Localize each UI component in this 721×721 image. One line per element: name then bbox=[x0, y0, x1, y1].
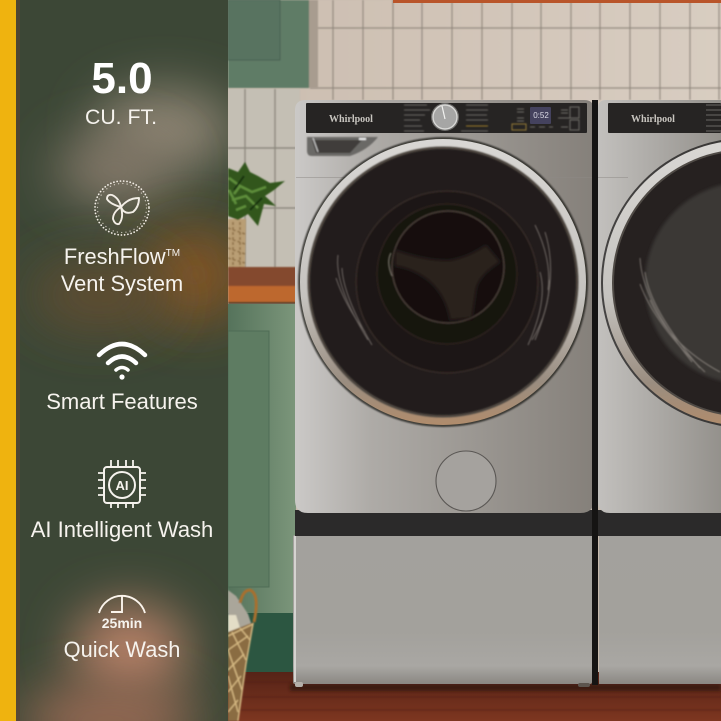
glass swirl highlights bbox=[336, 225, 551, 345]
capacity figure: 5.0 bbox=[91, 54, 153, 103]
label: ai wash: AI Intelligent Wash bbox=[31, 517, 213, 542]
label: freshflow: FreshFlow bbox=[64, 244, 166, 269]
wicker laundry basket bbox=[228, 590, 256, 721]
cycle labels bbox=[404, 105, 488, 131]
door lower shadow bbox=[298, 137, 588, 427]
icon: fan with dotted ring bbox=[95, 181, 149, 235]
ai wash bbox=[31, 460, 213, 542]
display 0:52 bbox=[530, 107, 551, 124]
feature sidebar bbox=[16, 0, 250, 721]
icon: ai chip bbox=[98, 460, 146, 508]
black gap band bbox=[295, 510, 593, 536]
brand logo: Whirlpool bbox=[329, 114, 373, 125]
pedestal right bbox=[599, 534, 721, 684]
display 0:52: 0:52 bbox=[533, 111, 549, 120]
drum interior bbox=[356, 191, 538, 373]
quick wash bbox=[64, 595, 180, 662]
display side buttons bbox=[512, 107, 579, 130]
upper green cabinet bbox=[228, 0, 318, 88]
label: freshflow: TM bbox=[166, 248, 180, 259]
detergent drawer bbox=[307, 137, 378, 156]
door handle circle bbox=[436, 451, 496, 511]
pedestal left bbox=[293, 535, 592, 687]
potted plant bbox=[228, 162, 285, 271]
washer body bbox=[295, 100, 594, 513]
door glass bbox=[308, 146, 578, 418]
wooden countertop bbox=[228, 267, 296, 304]
label: smart features: Smart Features bbox=[46, 389, 198, 414]
icon: ai chip: AI bbox=[116, 478, 128, 493]
icon: wifi bbox=[99, 344, 145, 380]
black gap between machines bbox=[592, 100, 598, 685]
orange shelf bbox=[393, 0, 721, 3]
lower green cabinet bbox=[228, 304, 296, 673]
freshflow feature bbox=[61, 181, 183, 296]
smart features bbox=[46, 344, 198, 414]
black gap band right bbox=[598, 510, 721, 536]
control panel right: Whirlpool bbox=[631, 114, 675, 125]
wall tiles above the machines bbox=[300, 0, 721, 110]
sidebar gradient background bbox=[16, 0, 250, 721]
dryer body bbox=[598, 100, 721, 513]
label: 25min: 25min bbox=[102, 615, 142, 631]
control panel right bbox=[608, 103, 721, 133]
capacity figure bbox=[85, 54, 157, 129]
wood floor bbox=[228, 672, 721, 721]
label: quick wash: Quick Wash bbox=[64, 637, 180, 662]
capacity figure: CU. FT. bbox=[85, 106, 157, 129]
washer left bbox=[293, 100, 594, 687]
washer right bbox=[598, 100, 721, 684]
cycle knob bbox=[431, 103, 459, 131]
left wall tiles bbox=[228, 89, 300, 269]
door chrome ring bbox=[300, 139, 586, 425]
icon: clock bbox=[99, 595, 145, 613]
kitchen background scene bbox=[228, 0, 721, 721]
yellow side strip bbox=[0, 0, 16, 721]
control panel bbox=[306, 103, 587, 133]
freshflow feature: Vent System bbox=[61, 271, 183, 296]
door right bbox=[601, 138, 721, 428]
